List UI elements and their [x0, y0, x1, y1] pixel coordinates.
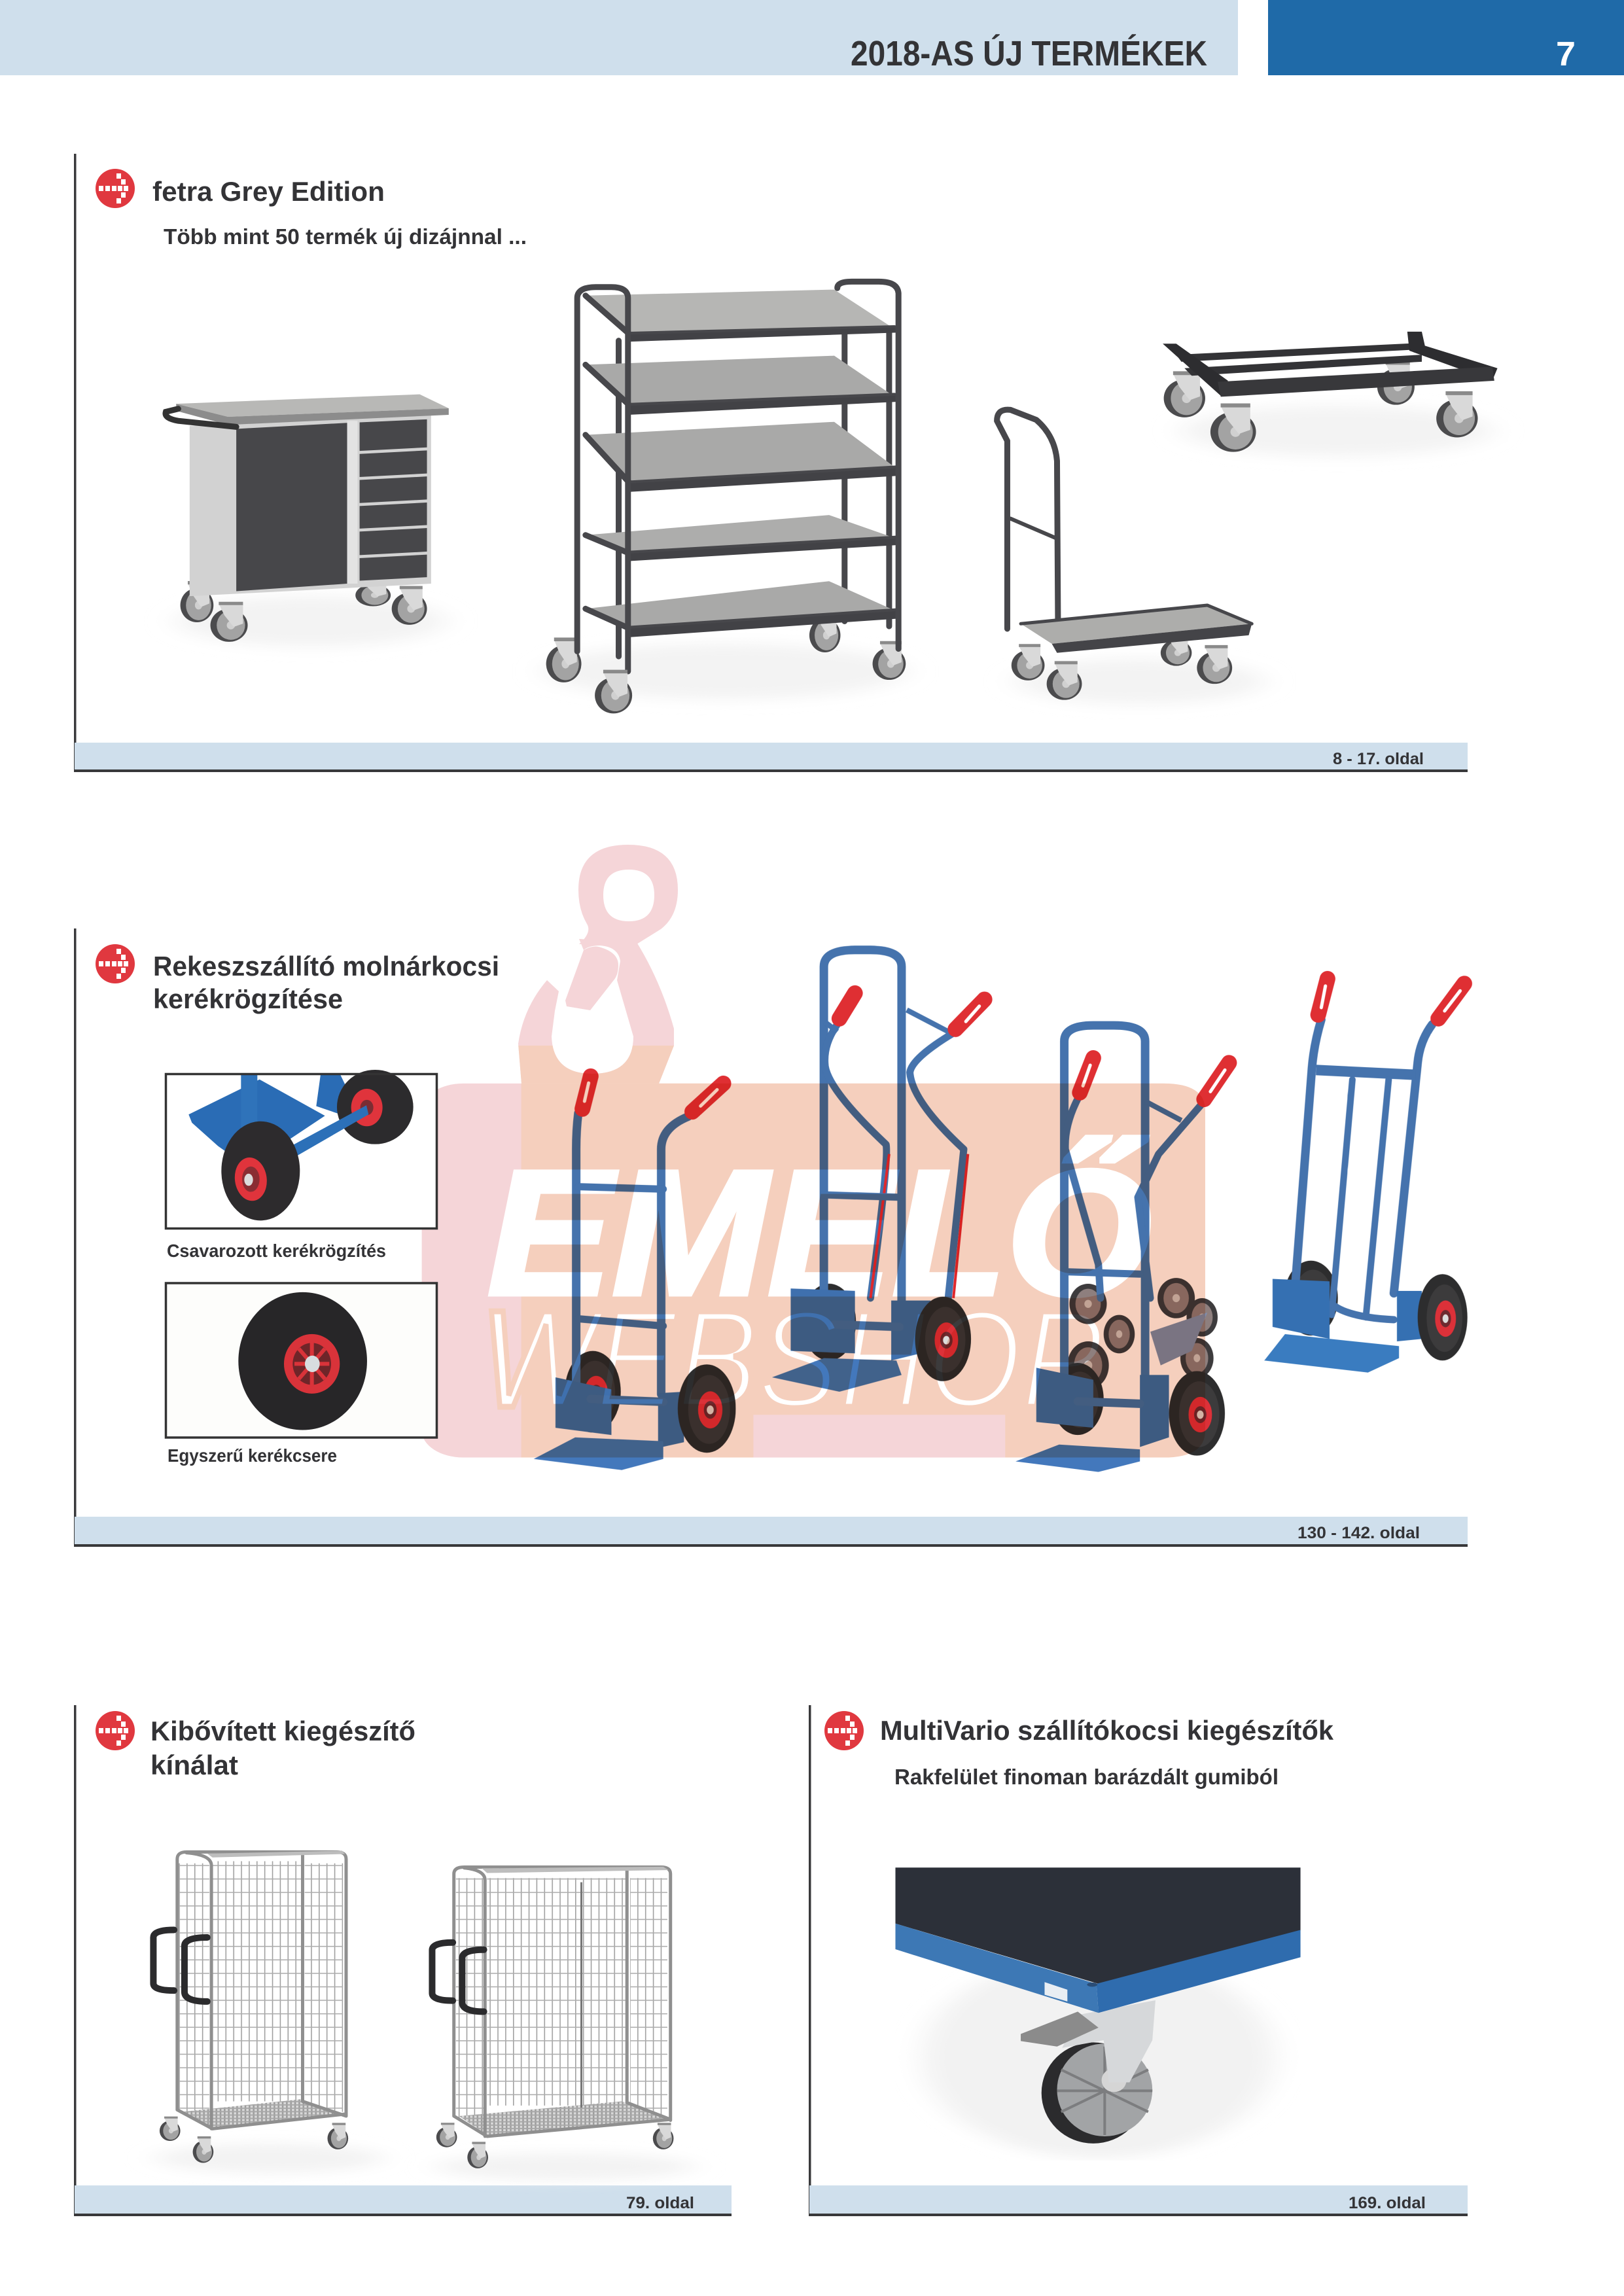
- photo frame: bolted wheel mount: [166, 1074, 437, 1229]
- caption: Csavarozott kerékrögzítés: Csavarozott kerékrögzítés: [167, 1241, 386, 1261]
- heading: Rekeszszállító molnárkocsi: Rekeszszállító molnárkocsi: [153, 951, 499, 981]
- photo: rubber deck trolley corner: [895, 1867, 1301, 2161]
- panel: Rekeszszállító molnárkocsi: [74, 928, 1468, 1547]
- heading: fetra Grey Edition: fetra Grey Edition: [152, 176, 385, 207]
- heading: Kibővített kiegészítő: Kibővített kiegészítő: [150, 1716, 415, 1746]
- panel: MultiVario szállítókocsi kiegészítők: [809, 1705, 1468, 2216]
- header band: [0, 0, 1238, 75]
- panel: Kibővített kiegészítő kínálat: [74, 1705, 732, 2216]
- products: hand trucks: [534, 950, 1468, 1472]
- hand truck: stair climber: [1015, 1025, 1229, 1472]
- header title: 2018-AS ÚJ TERMÉKEK: [851, 34, 1207, 73]
- page reference: 8 - 17. oldal: [1333, 750, 1424, 768]
- page reference: 79. oldal: [626, 2194, 694, 2212]
- product: pallet dolly: [1163, 332, 1498, 456]
- panel: fetra Grey Edition: [74, 154, 1468, 772]
- icon: red arrow badge: [824, 1711, 864, 1750]
- photo: bolted wheel mount: [166, 1070, 437, 1237]
- subheading: Több mint 50 termék új dizájnnal ...: [164, 224, 527, 249]
- product: wide wire cage trolley: [432, 1867, 694, 2180]
- product: folding platform trolley: [997, 410, 1264, 704]
- photo: single wheel: [166, 1283, 437, 1438]
- product: grey cabinet trolley: [166, 395, 449, 646]
- subheading: Rakfelület finoman barázdált gumiból: [894, 1765, 1279, 1789]
- icon: red arrow badge: [96, 944, 135, 983]
- heading: kerékrögzítése: kerékrögzítése: [153, 983, 343, 1014]
- page reference: 169. oldal: [1349, 2194, 1426, 2212]
- heading: MultiVario szállítókocsi kiegészítők: MultiVario szállítókocsi kiegészítők: [880, 1715, 1334, 1746]
- page reference: 130 - 142. oldal: [1297, 1524, 1420, 1542]
- photo frame: single wheel: [166, 1283, 437, 1438]
- icon: red arrow badge: [96, 1711, 135, 1750]
- hand truck: tall frame: [772, 950, 985, 1392]
- hand truck: three-bar frame: [1264, 979, 1468, 1373]
- page number: 7: [1556, 35, 1576, 73]
- watermark: hook and rounded panel: [422, 845, 1205, 1458]
- icon: red arrow badge: [96, 169, 135, 208]
- hand truck: standard: [534, 1076, 735, 1470]
- page number tab: [1268, 0, 1624, 75]
- product: narrow wire cage trolley: [153, 1850, 383, 2173]
- watermark: EMELŐ: EMELŐ: [487, 1133, 1152, 1332]
- caption: Egyszerű kerékcsere: Egyszerű kerékcsere: [168, 1445, 337, 1466]
- product: sloped shelf trolley: [544, 281, 907, 713]
- watermark: WEBSHOP: WEBSHOP: [481, 1281, 1103, 1436]
- heading: kínálat: kínálat: [150, 1750, 238, 1780]
